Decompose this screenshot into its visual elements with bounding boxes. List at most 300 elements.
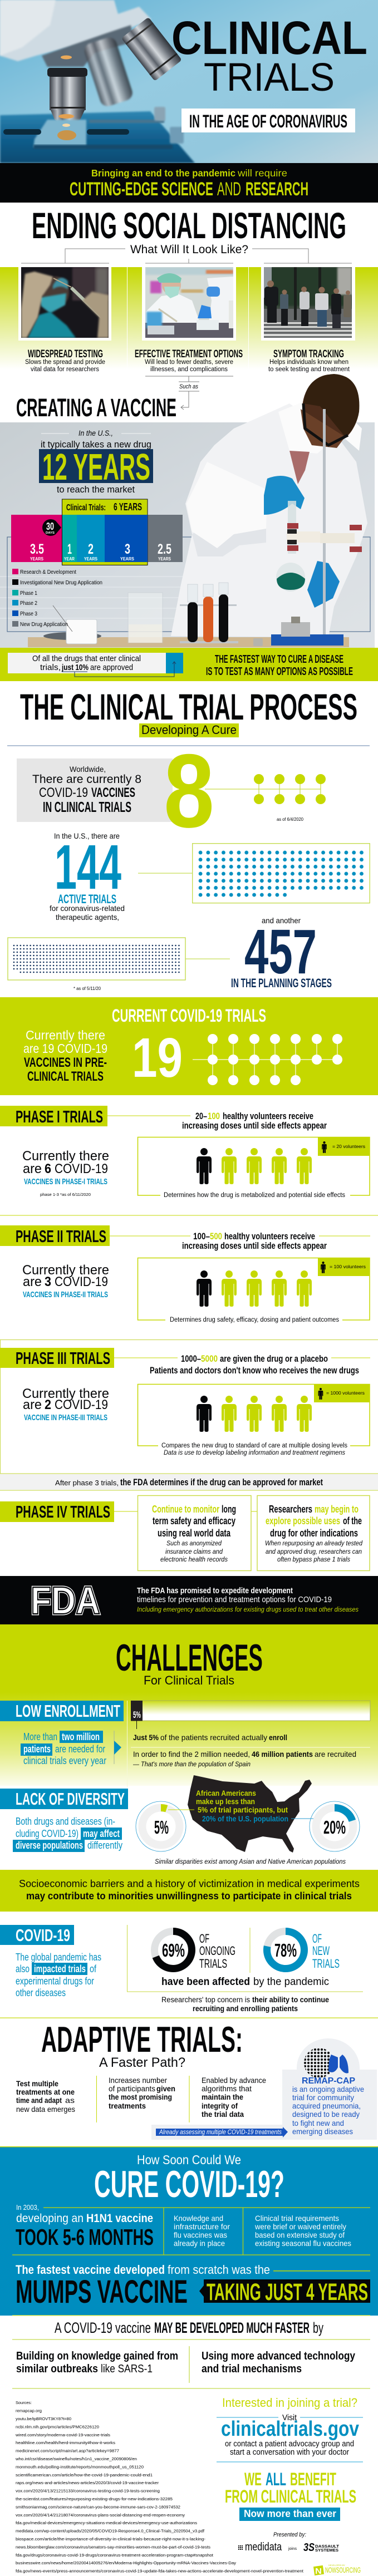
text: trial requirements xyxy=(254,2214,351,2248)
stat: 457 planning stages: 457 xyxy=(244,917,317,987)
callout: REMAP-CAP: emerging diseases xyxy=(292,2127,353,2136)
intro band: CUTTING-EDGE SCIENCE xyxy=(70,179,213,200)
panel: phase I: Determines how the drug is metabolized and potential side effects xyxy=(164,1192,345,1199)
sources list: businesswire.com/news/home/20200414005276/en/Moderna-Highlights-Opportunity-mRNA-Vaccines-Vaccines-Day xyxy=(16,2560,236,2565)
band: FDA promise: The FDA has promised to expedite development xyxy=(137,1586,293,1595)
mumps vaccine stat: The fastest vaccine developed xyxy=(16,2263,165,2277)
call to action: start a conversation with your doctor xyxy=(230,2447,349,2457)
text: trial requirements: based on extensive study of xyxy=(255,2230,345,2239)
panel: phase II xyxy=(0,1225,370,1323)
panel: phase I: healthy volunteers receive xyxy=(223,1111,313,1121)
caption: widespread testing xyxy=(25,348,105,373)
callout: REMAP-CAP: trial for community xyxy=(292,2093,354,2102)
caption: symptom tracking xyxy=(268,348,350,373)
section: challenges: For Clinical Trials xyxy=(144,1673,234,1687)
intro band: will require xyxy=(237,168,287,179)
card: monitor long term safety: electronic health records xyxy=(160,1555,228,1563)
marker: 30 days: DAYS xyxy=(46,531,55,535)
title xyxy=(171,12,367,100)
section: how soon could we cure covid-19 xyxy=(0,2146,378,2316)
callout: REMAP-CAP: designed to be ready xyxy=(292,2110,360,2119)
column: test multiple treatments: Test multiple xyxy=(16,2079,58,2088)
callout: REMAP-CAP xyxy=(151,2038,377,2140)
low enrollment: In order to find the 2 million needed, xyxy=(133,1750,250,1759)
closing statement: Now more than ever xyxy=(244,2508,336,2519)
band: FDA approval: the FDA determines if the drug can be approved for market xyxy=(120,1477,323,1488)
logo: NowSourcing xyxy=(313,2564,361,2576)
stat: 457 planning stages xyxy=(8,916,332,991)
band: socioeconomic barriers: Socioeconomic barriers and a history of victimization in medical experiments xyxy=(19,1878,360,1889)
chart: timeline bar: 3.5 xyxy=(30,541,44,557)
panel: phase I: 100 xyxy=(208,1111,220,1121)
chart: 20 percent ring xyxy=(310,1801,360,1851)
stat: 8 vaccines: IN CLINICAL TRIALS xyxy=(43,799,131,815)
map: United States: African Americans xyxy=(196,1789,256,1797)
chart legend: Phase 1 xyxy=(20,590,37,597)
chart legend: Investigational New Drug Application xyxy=(20,579,102,586)
chart: timeline bar xyxy=(11,499,183,565)
panel: phase III: Compares the new drug to standard of care at multiple dosing levels xyxy=(161,1442,347,1449)
H1N1 vaccine stat xyxy=(16,2203,154,2250)
icons: volunteers xyxy=(197,1270,312,1307)
panel: covid-19 challenge: COVID-19 xyxy=(16,1925,70,1945)
section: may be developed faster: and trial mechanisms xyxy=(202,2363,302,2375)
panel: current covid-19 trials: Currently there xyxy=(26,1028,105,1042)
panel: phase III: = 1000 volunteers xyxy=(326,1390,365,1396)
panel: current covid-19 trials: are 19 COVID-19 xyxy=(23,1041,107,1056)
stat: 144 active trials: ACTIVE TRIALS xyxy=(58,892,116,906)
text: knowledge and infrastructure: Knowledge and xyxy=(174,2214,223,2223)
callout: 10 percent approved: just 10% xyxy=(61,663,89,672)
call to action: or contact a patient advocacy group and xyxy=(225,2439,354,2449)
heading: clinical trial process: Developing A Cure xyxy=(141,723,237,737)
column: algorithms: maintain the xyxy=(202,2092,243,2101)
card: monitor long term safety: long xyxy=(222,1504,236,1515)
panel: three approaches xyxy=(0,265,378,373)
chart: timeline bar: YEAR xyxy=(64,556,75,562)
low enrollment: are needed for xyxy=(55,1743,105,1755)
chart: 69 percent donut: TRIALS xyxy=(199,1957,227,1971)
heading: ending social distancing: What Will It Look Like? xyxy=(130,243,248,256)
closing statement: BENEFIT xyxy=(290,2469,336,2489)
sources list: fda.gov/drugs/coronavirus-covid-19-drugs/coronavirus-treatment-acceleration-program-ctap#snapshot xyxy=(16,2553,214,2558)
low enrollment: clinical trials every year xyxy=(23,1755,106,1766)
panel: phase I: 6 xyxy=(45,1161,51,1176)
arrow: already assessing xyxy=(156,2127,288,2137)
column: participants: given xyxy=(156,2084,175,2093)
section: adaptive trials: ADAPTIVE TRIALS: xyxy=(41,2019,243,2060)
stat: 8 vaccines: Worldwide, xyxy=(70,765,106,774)
callout: REMAP-CAP: is an ongoing adaptive xyxy=(292,2085,364,2094)
panel: phase II: = 100 volunteers xyxy=(330,1264,366,1269)
band: socioeconomic barriers xyxy=(0,1870,378,1912)
sources list: smithsonianmag.com/science-nature/can-you-become-immune-sars-cov-2-180974532 xyxy=(16,2504,180,2510)
stat: 144 active trials: for coronavirus-related xyxy=(50,904,125,913)
caption: widespread testing: vital data for researchers xyxy=(31,366,99,373)
panel: phase II: increasing doses until side effects appear xyxy=(182,1240,327,1251)
chart legend: Phase 3 xyxy=(20,610,37,617)
column: algorithms: integrity of xyxy=(202,2101,238,2110)
sources list: news.bloomberglaw.com/coronavirus/senators-say-minorities-women-must-be-part-of-covid-19-tests xyxy=(16,2544,210,2550)
callout: twelve years xyxy=(39,428,153,495)
column: participants: the most promising xyxy=(109,2092,172,2101)
chart: timeline bar: 6 YEARS xyxy=(114,501,142,513)
panel: phase III: Data is use to develop labeling information and treatment regimens xyxy=(164,1450,345,1456)
panel: phase I xyxy=(0,1106,370,1199)
callout: twelve years: In the U.S., xyxy=(78,428,113,437)
photo: symptom tracking xyxy=(261,265,355,341)
text: trial requirements: Clinical trial requirements xyxy=(255,2214,339,2223)
panel: phase II: VACCINES IN PHASE-II TRIALS xyxy=(23,1290,108,1299)
bar: five percent xyxy=(131,1701,370,1729)
callout: REMAP-CAP: REMAP-CAP xyxy=(302,2076,355,2086)
chart: timeline bar: YEARS xyxy=(158,556,171,562)
map: United States: make up less than xyxy=(196,1797,255,1806)
panel: phase IV: PHASE IV TRIALS xyxy=(16,1502,110,1521)
intro band: AND xyxy=(217,179,241,200)
stat: 144 active trials: In the U.S., there are xyxy=(54,831,120,840)
chart: 78 percent donut xyxy=(267,1931,340,1971)
column: test multiple treatments: treatments at one xyxy=(16,2087,75,2096)
heading: creating a vaccine xyxy=(16,376,233,422)
column: test multiple treatments: time and adapt xyxy=(16,2096,62,2105)
chart: 5 percent ring xyxy=(136,1801,186,1851)
map: United States: 5% of trial participants, but xyxy=(198,1805,288,1814)
closing statement: WE xyxy=(244,2469,262,2489)
chart: timeline bar: 2.5 xyxy=(158,541,171,557)
section: may be developed faster: similar outbreaks xyxy=(16,2363,98,2375)
photo: widespread testing xyxy=(18,265,111,341)
intro band: Bringing an end to the pandemic xyxy=(91,168,235,179)
band: fastest way to cure xyxy=(0,648,378,681)
panel: phase III: 1000– xyxy=(181,1353,201,1364)
marker: 30 days: 30 xyxy=(46,521,54,532)
chart: timeline bar: 2 xyxy=(88,541,94,557)
panel: phase II: COVID-19 xyxy=(55,1274,108,1289)
panel: phase I: phase 1-3 *as of 6/11/2020 xyxy=(40,1192,91,1197)
stat: 8 vaccines: There are currently 8 xyxy=(32,773,141,786)
sources list: remapcap.org xyxy=(16,2408,42,2413)
low enrollment: More than xyxy=(23,1731,57,1742)
panel: phase I: are xyxy=(23,1161,42,1176)
hero photo: microscope xyxy=(0,0,378,163)
caption: symptom tracking: to seek testing and treatment xyxy=(268,366,350,373)
text: trial requirements: were brief or waived entirely xyxy=(254,2222,346,2231)
card: repurposing: may begin to xyxy=(315,1504,359,1515)
logo: NowSourcing: N xyxy=(315,2567,322,2576)
low enrollment: two million xyxy=(62,1731,100,1742)
hero panel xyxy=(0,0,378,163)
panel: covid-19 challenge: their ability to continue xyxy=(252,1995,329,2004)
chart: 69 percent donut: ONGOING xyxy=(199,1944,235,1958)
lack of diversity: LACK OF DIVERSITY xyxy=(16,1789,125,1809)
chart: timeline bar: YEARS xyxy=(84,556,98,562)
sources list: monmouth.edu/polling-institute/reports/monmouthpoll_us_051120 xyxy=(16,2464,144,2470)
arrow: already assessing: Already assessing multiple COVID-19 treatments xyxy=(159,2128,282,2136)
caption: effective treatment options xyxy=(135,348,243,373)
panel: covid-19 challenge: other diseases xyxy=(16,1987,66,1998)
panel: lab background with scientist xyxy=(0,374,375,648)
low enrollment: Just 5% xyxy=(133,1733,159,1742)
sources list: who.int/csr/disease/swineflu/notes/h1n1_vaccine_20090806/en xyxy=(15,2456,137,2461)
stat: 457 planning stages: and another xyxy=(262,916,301,925)
low enrollment: enroll xyxy=(269,1733,287,1742)
column: algorithms: algorithms that xyxy=(202,2084,252,2093)
panel: phase III: are given the drug or a placebo xyxy=(220,1353,328,1364)
card: monitor long term safety: Continue to monitor xyxy=(152,1504,219,1515)
sources list: fda.gov/news-events/press-announcements/coronavirus-covid-19-update-fda-takes-new-actions-accelerate-development-novel-prevention-treatment xyxy=(16,2569,304,2573)
heading: creating a vaccine: CREATING A VACCINE xyxy=(16,393,176,422)
panel: phase IV xyxy=(0,1496,370,1570)
column: test multiple treatments: new data emerges xyxy=(16,2105,75,2114)
low enrollment: are recruited xyxy=(315,1750,356,1759)
map: United States xyxy=(168,1775,335,1853)
chart: timeline bar: YEARS xyxy=(30,556,44,562)
column: participants: of participants xyxy=(109,2084,155,2093)
card: monitor long term safety: term safety and efficacy xyxy=(153,1515,235,1526)
lack of diversity: differently xyxy=(87,1840,122,1851)
callout: REMAP-CAP: acquired pneumonia, xyxy=(292,2101,361,2110)
heading: ending social distancing xyxy=(21,205,352,263)
lack of diversity: may affect xyxy=(83,1828,120,1839)
sources list: medicinenet.com/script/main/art.asp?articlekey=9877 xyxy=(16,2449,119,2453)
section: adaptive trials xyxy=(16,2019,377,2140)
panel: phase II: 3 xyxy=(45,1274,51,1289)
card: repurposing xyxy=(257,1496,370,1570)
section: challenges xyxy=(0,1624,378,1787)
panel: covid-19 challenge: also xyxy=(16,1963,30,1974)
stat: 457 planning stages: * as of 5/11/20 xyxy=(73,986,101,991)
panel: phase II: are xyxy=(23,1274,42,1289)
panel: current covid-19 trials: 19 xyxy=(132,1027,183,1089)
sources list: ncbi.nlm.nih.gov/pmc/articles/PMC6226120 xyxy=(16,2424,99,2430)
caption: effective treatment options: illnesses, and complications xyxy=(150,366,228,373)
sources list: healthline.com/health/herd-immunity#how-it-works xyxy=(16,2440,115,2445)
card: repurposing: Researchers xyxy=(269,1504,312,1515)
stat: 8 vaccines xyxy=(17,732,326,849)
column: participants xyxy=(109,2076,175,2110)
text: knowledge and infrastructure: already in place xyxy=(174,2239,225,2248)
card: repurposing: and approved drug, researchers can xyxy=(266,1548,362,1555)
callout: twelve years: it typically takes a new drug xyxy=(41,439,151,450)
chart: timeline bar: 3 xyxy=(125,541,130,557)
panel: phase III: Currently there xyxy=(22,1386,109,1401)
logos: presented by xyxy=(238,2531,340,2554)
panel: covid-19 challenge: of xyxy=(90,1963,97,1974)
logos: presented by: 3S xyxy=(303,2541,315,2554)
panel: phase III: 2 xyxy=(45,1397,51,1412)
intro band xyxy=(0,163,378,203)
callout: 10 percent approved: Of all the drugs that enter clinical xyxy=(32,654,141,663)
callout: 10 percent approved xyxy=(8,653,183,677)
sources list: fda.gov/medical-devices/emergency-situations-medical-devices/emergency-use-authorizations xyxy=(16,2520,197,2525)
chart: 78 percent donut: OF xyxy=(312,1932,322,1945)
low enrollment: LOW ENROLLMENT xyxy=(16,1701,120,1721)
mumps vaccine stat xyxy=(16,2263,370,2310)
panel: phase II: Determines drug safety, efficacy, dosing and patient outcomes xyxy=(170,1317,339,1323)
chart legend: Phase 2 xyxy=(20,600,37,607)
section: may be developed faster: A COVID-19 vaccine xyxy=(55,2319,151,2336)
text: knowledge and infrastructure: infrastructure for xyxy=(174,2222,230,2231)
band: FDA approval: After phase 3 trials, xyxy=(55,1479,119,1487)
panel: phase I: increasing doses until side effects appear xyxy=(182,1120,327,1131)
sources list: youtu.be/tpBROVT3KY8?t=80 xyxy=(16,2416,71,2421)
section: may be developed faster xyxy=(12,2315,370,2388)
panel: phase I: Currently there xyxy=(22,1149,109,1164)
mumps vaccine stat: MUMPS VACCINE xyxy=(16,2274,188,2310)
panel: current covid-19 trials: CLINICAL TRIALS xyxy=(27,1069,104,1084)
logos: presented by: Presented by: xyxy=(273,2531,306,2538)
stat: 144 active trials: 144 xyxy=(55,832,121,902)
panel: covid-19 challenge: experimental drugs for xyxy=(16,1976,94,1987)
low enrollment: — That's more than the population of Spain xyxy=(132,1760,251,1768)
intro band: RESEARCH xyxy=(246,179,308,200)
illustration: scientist xyxy=(171,374,367,640)
panel: current covid-19 trials xyxy=(0,997,378,1095)
H1N1 vaccine stat: developing an xyxy=(16,2212,84,2225)
band: socioeconomic barriers: may contribute to minorities unwillingness to participate in clinical trials xyxy=(26,1890,352,1902)
panel: covid-19 challenge: by the pandemic xyxy=(253,1976,329,1988)
panel: phase III: COVID-19 xyxy=(55,1397,108,1412)
section: challenges: CHALLENGES xyxy=(116,1637,263,1679)
stat: 144 active trials xyxy=(50,831,370,922)
band: FDA promise: Including emergency authorizations for existing drugs used to treat other diseases xyxy=(137,1605,359,1613)
callout: 10 percent approved: are approved xyxy=(90,663,133,672)
panel: phase II: healthy volunteers receive xyxy=(224,1231,315,1242)
call to action: Visit xyxy=(282,2413,297,2422)
logo: FDA: FDA xyxy=(31,1579,100,1622)
band: FDA promise xyxy=(0,1576,378,1624)
chart: timeline bar: Clinical Trials: xyxy=(66,503,106,513)
marker: 30 days xyxy=(42,519,61,536)
chart: timeline bar: YEARS xyxy=(120,556,135,562)
caption: widespread testing: Slows the spread and provide xyxy=(25,359,105,366)
H1N1 vaccine stat: In 2003, xyxy=(16,2203,39,2211)
card: repurposing: explore possible uses xyxy=(266,1515,340,1526)
lack of diversity xyxy=(0,1775,360,1865)
logos: presented by: DASSAULT xyxy=(315,2545,340,2549)
chart: 69 percent donut xyxy=(155,1931,235,1971)
logos: presented by: SYSTEMES xyxy=(315,2549,338,2553)
map: United States: 20% of the U.S. population xyxy=(202,1814,288,1823)
panel: phase I: COVID-19 xyxy=(55,1161,108,1176)
low enrollment: of the patients recruited actually xyxy=(160,1733,267,1742)
stat: 144 active trials: therapeutic agents, xyxy=(56,913,119,922)
mumps vaccine stat: from scratch was the xyxy=(168,2263,270,2277)
section: may be developed faster: Using more advanced technology xyxy=(202,2350,356,2362)
section: adaptive trials: A Faster Path? xyxy=(99,2055,185,2070)
chart legend: Research & Development xyxy=(20,569,76,575)
panel: covid-19 challenge xyxy=(0,1925,363,2013)
panel: phase III: 5000 xyxy=(201,1353,218,1364)
chart: 78 percent donut: TRIALS xyxy=(312,1957,340,1971)
lack of diversity: cluding COVID-19) xyxy=(16,1828,78,1839)
section: may be developed faster: Building on knowledge gained from xyxy=(16,2350,178,2362)
low enrollment xyxy=(0,1701,370,1768)
icons: volunteers xyxy=(197,1396,312,1432)
icon: globe and lungs xyxy=(304,2048,348,2078)
column: algorithms xyxy=(202,2076,266,2119)
sources list: vox.com/2020/4/14/21218074/coronavirus-plans-social-distancing-end-reopen-economy xyxy=(16,2513,185,2518)
chart: 78 percent donut: NEW xyxy=(312,1944,330,1958)
logos: presented by: medidata xyxy=(245,2541,282,2553)
sources list: the-scientist.com/features/repurposing-existing-drugs-for-new-indications-32285 xyxy=(16,2496,173,2501)
caption: effective treatment options: EFFECTIVE TREATMENT OPTIONS xyxy=(135,348,243,360)
logos: presented by: joins xyxy=(288,2547,297,2551)
H1N1 vaccine stat: H1N1 vaccine xyxy=(86,2212,153,2225)
chart: 5 percent ring: 5% xyxy=(154,1817,169,1838)
panel: covid-19 challenge: have been affected xyxy=(161,1976,250,1988)
chart: timeline bar: 1 xyxy=(67,541,72,557)
panel: phase II: PHASE II TRIALS xyxy=(16,1227,106,1246)
chart legend xyxy=(12,569,102,628)
sources list: vox.com/2020/4/13/21215133/coronavirus-testing-covid-19-tests-screening xyxy=(16,2489,160,2493)
sources list: raps.org/news-and-articles/news-articles/2020/3/covid-19-vaccine-tracker xyxy=(16,2480,159,2485)
card: monitor long term safety: using real world data xyxy=(158,1528,231,1539)
sources list: biospace.com/article/the-importance-of-diversity-in-clinical-trials-because-right-now-it-s-lacking- xyxy=(16,2536,206,2541)
lack of diversity: Similar disparities exist among Asian and Native American populations xyxy=(155,1858,346,1865)
column: participants: Increases number xyxy=(109,2076,167,2085)
heading: clinical trial process xyxy=(7,686,370,746)
caption: widespread testing: WIDESPREAD TESTING xyxy=(28,348,103,360)
photo: effective treatment xyxy=(142,265,236,341)
chart: 69 percent donut: 69% xyxy=(162,1940,185,1961)
text: knowledge and infrastructure: flu vaccines was xyxy=(174,2230,227,2239)
caption: effective treatment options: Will lead to fewer deaths, severe xyxy=(145,359,233,366)
sources list xyxy=(15,2400,304,2573)
panel: phase III xyxy=(0,1340,378,1474)
stat: 8 vaccines: COVID-19 xyxy=(39,785,88,800)
title: TRIALS xyxy=(204,56,335,100)
chart: 20 percent ring: 20% xyxy=(323,1817,346,1838)
column: algorithms: Enabled by advance xyxy=(202,2076,266,2085)
stat: 8 vaccines: 8 xyxy=(164,732,214,849)
chart: 69 percent donut: OF xyxy=(199,1932,209,1945)
caption: symptom tracking: Helps individuals know when xyxy=(269,359,348,366)
panel: phase I: = 20 volunteers xyxy=(332,1144,365,1149)
panel: phase I: PHASE I TRIALS xyxy=(16,1107,103,1126)
H1N1 vaccine stat: TOOK 5-6 MONTHS xyxy=(16,2224,154,2250)
panel: covid-19 challenge: The global pandemic has xyxy=(16,1952,101,1963)
icons: volunteers xyxy=(197,1148,312,1184)
card: monitor long term safety xyxy=(138,1496,251,1570)
illustration: lab glassware xyxy=(43,583,343,646)
panel: phase III: are xyxy=(23,1397,42,1412)
callout: twelve years: 12 YEARS xyxy=(42,446,150,488)
text: knowledge and infrastructure xyxy=(174,2214,230,2248)
card: monitor long term safety: Such as anonymized xyxy=(166,1539,222,1547)
call to action: Interested in joining a trial? xyxy=(222,2396,357,2410)
heading: creating a vaccine: Such as xyxy=(179,383,198,390)
logo: NowSourcing: DEVELOPED BY xyxy=(328,2564,345,2567)
sources list: wired.com/story/moderna-covid-19-vaccine-trials xyxy=(15,2432,110,2437)
callout: twelve years: to reach the market xyxy=(57,484,135,495)
panel: phase II: Currently there xyxy=(22,1263,109,1278)
card: repurposing: of the xyxy=(343,1515,362,1526)
low enrollment: patients xyxy=(23,1743,51,1755)
section: how soon could we cure covid-19: How Soon Could We xyxy=(137,2153,241,2167)
low enrollment: 46 million patients xyxy=(252,1750,313,1759)
chart: 78 percent donut: 78% xyxy=(274,1940,297,1961)
section: may be developed faster: by xyxy=(313,2319,323,2336)
column: test multiple treatments xyxy=(16,2079,75,2114)
panel: current covid-19 trials: VACCINES IN PRE- xyxy=(24,1055,107,1070)
panel: phase III: PHASE III TRIALS xyxy=(16,1348,110,1368)
chart legend: New Drug Application xyxy=(20,621,68,628)
column: algorithms: the trial data xyxy=(202,2110,244,2119)
card: monitor long term safety: insurance claims and xyxy=(165,1548,223,1555)
section: may be developed faster: like SARS-1 xyxy=(101,2363,153,2375)
